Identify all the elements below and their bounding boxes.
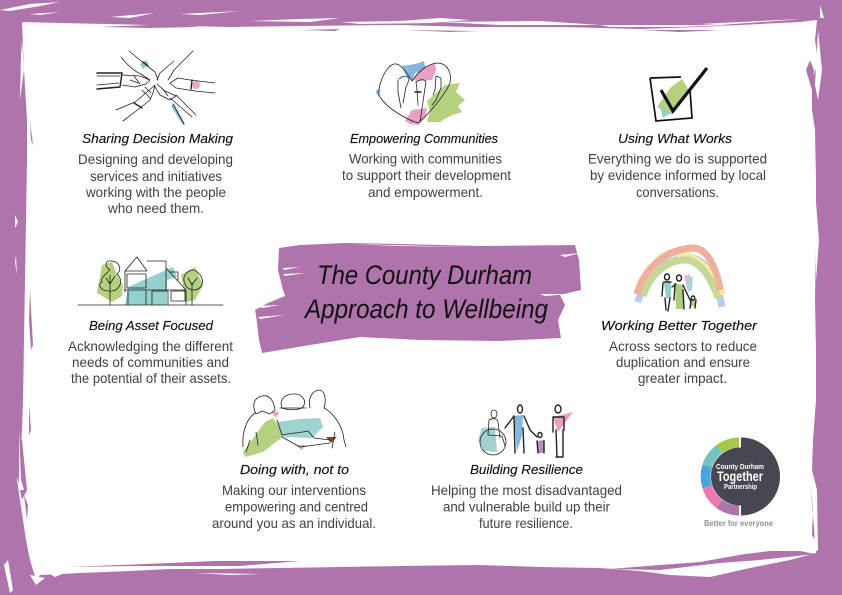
text block [68, 339, 233, 386]
main title text [303, 260, 548, 324]
text block: Everything we do is supported [588, 152, 767, 166]
text block [212, 483, 376, 531]
icon: people embracing: Doing with, not to [240, 463, 349, 477]
title banner [255, 243, 581, 353]
text block [609, 339, 757, 386]
icon: rainbow and family [601, 248, 758, 333]
icon: ticked box [618, 68, 732, 146]
text block [78, 152, 233, 216]
panel: empowering communities [342, 61, 511, 200]
text block: needs of communities and [72, 355, 229, 370]
main title text: The County Durham [317, 260, 532, 290]
icon: heart with raised fists: Empowering Communities [350, 132, 498, 146]
panel: sharing decision making [78, 51, 233, 216]
text block: working with the people [85, 185, 226, 200]
text block [588, 152, 767, 200]
text block: Helping the most disadvantaged [431, 483, 622, 498]
text block: Designing and developing [78, 152, 233, 167]
text block: around you as an individual. [212, 516, 376, 531]
icon: rainbow and family: Working Better Together [601, 319, 758, 333]
text block: future resilience. [479, 516, 573, 531]
text block: greater impact. [638, 371, 727, 386]
icon: house and trees: Being Asset Focused [89, 319, 214, 333]
panel: being asset focused [68, 257, 233, 386]
icon: joined hands [82, 51, 233, 146]
text block: services and initiatives [90, 169, 222, 184]
text block: who need them. [107, 201, 204, 216]
text block [342, 152, 511, 200]
logo: County Durham Together Partnership: Partnership [724, 484, 757, 491]
text block: and vulnerable build up their [443, 500, 610, 514]
panel: building resilience [431, 405, 622, 531]
logo: County Durham Together Partnership [701, 438, 780, 528]
logo: County Durham Together Partnership: Better for everyone [704, 519, 774, 528]
panel: doing with, not to [212, 390, 376, 531]
text block: Across sectors to reduce [609, 339, 757, 354]
banner brush stroke [255, 243, 581, 353]
icon: diverse figures [470, 405, 583, 477]
logo: County Durham Together Partnership: Together [717, 469, 764, 484]
icon: joined hands: Sharing Decision Making [82, 132, 233, 146]
icon: ticked box: Using What Works [618, 132, 732, 146]
text block: conversations. [636, 185, 719, 200]
text block: and empowerment. [368, 185, 483, 200]
text block: duplication and ensure [616, 355, 750, 370]
text block: Acknowledging the different [68, 339, 233, 354]
icon: heart with raised fists [350, 61, 498, 146]
panel: working better together [601, 248, 758, 386]
text block: Working with communities [349, 152, 502, 166]
logo: County Durham Together Partnership: County Durham [716, 462, 764, 471]
text block: to support their development [342, 168, 511, 183]
text block: Making our interventions [222, 483, 366, 498]
text block [431, 483, 622, 531]
logo ring segments [701, 438, 739, 516]
main title text: Approach to Wellbeing [303, 294, 548, 324]
text block: by evidence informed by local [590, 168, 766, 183]
text block: empowering and centred [225, 500, 368, 514]
panel: using what works [588, 68, 767, 200]
icon: people embracing [240, 390, 349, 477]
text block: the potential of their assets. [71, 371, 231, 386]
icon: house and trees [78, 257, 223, 333]
icon: diverse figures: Building Resilience [470, 463, 583, 477]
